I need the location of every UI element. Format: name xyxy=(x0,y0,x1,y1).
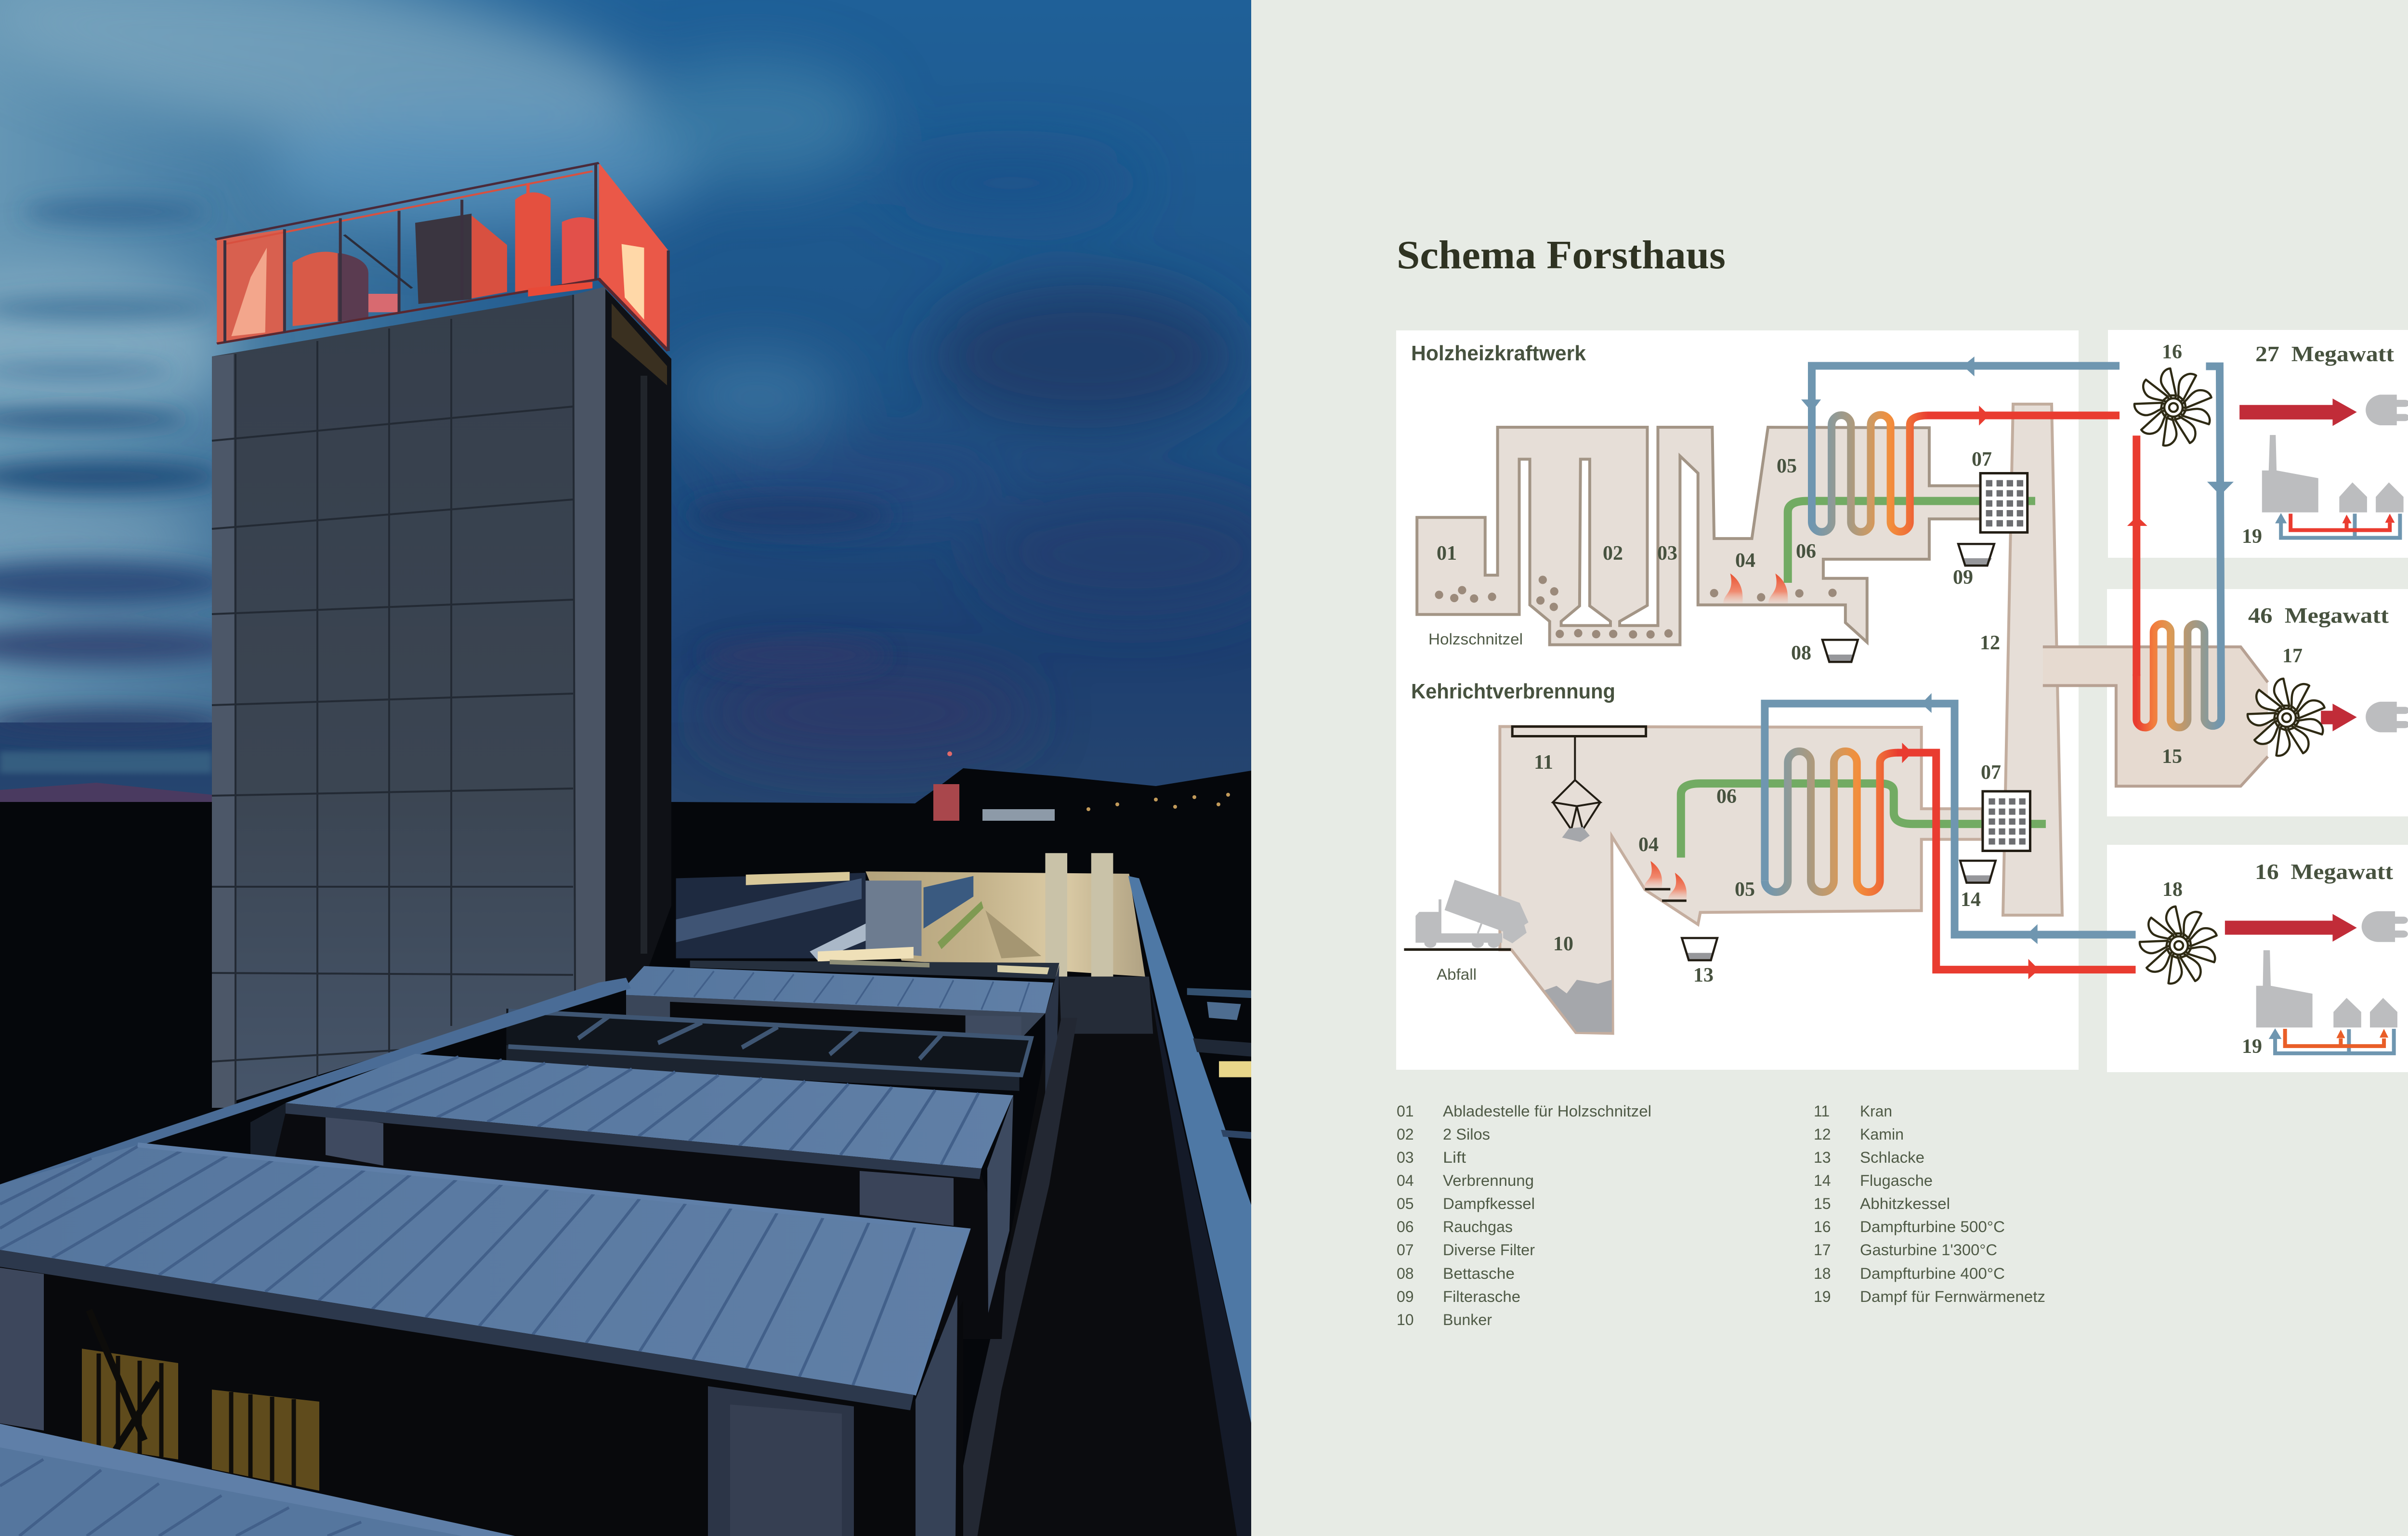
legend: Rauchgas xyxy=(1443,1218,1513,1235)
right walkway and parapet xyxy=(949,876,1252,1536)
diagram number labels: 04 xyxy=(1735,550,1755,572)
legend: 19 xyxy=(1814,1288,1831,1305)
dark landscape and hills xyxy=(0,751,1251,821)
electricity arrow 46 xyxy=(2321,704,2357,731)
legend: 18 xyxy=(1814,1265,1831,1282)
right glass side xyxy=(599,163,668,351)
diagram number labels xyxy=(1437,341,2303,1058)
blue return pipe xyxy=(1812,366,2120,522)
middle roof with wall xyxy=(250,1054,1013,1339)
skylight rail xyxy=(690,960,1059,979)
diagram number labels: 11 xyxy=(1534,751,1553,774)
flow arrows xyxy=(1801,356,1989,425)
legend: 08 xyxy=(1397,1265,1414,1282)
red-lit glass crown on the tower xyxy=(215,163,668,351)
label: Holzschnitzel: Holzschnitzel xyxy=(1428,630,1523,648)
diagram number labels: 05 xyxy=(1735,879,1755,901)
red pipe xyxy=(1898,753,2135,970)
legend: Abladestelle für Holzschnitzel xyxy=(1443,1103,1651,1120)
legend: 15 xyxy=(1814,1195,1831,1212)
wall xyxy=(626,995,1045,1038)
parapet strip leading to the tower xyxy=(0,978,631,1190)
wood chips xyxy=(1435,576,1837,639)
ground line xyxy=(1404,948,1511,951)
electricity arrow 27 xyxy=(2239,398,2357,426)
legend: 07 xyxy=(1397,1241,1414,1259)
legend: 17 xyxy=(1814,1241,1831,1259)
legend: Kamin xyxy=(1860,1126,1904,1143)
flue gas pipe xyxy=(1788,501,2035,583)
front roof with wall xyxy=(0,1145,968,1536)
wood-fired plant building xyxy=(1417,356,2120,662)
walkway xyxy=(954,977,1237,1536)
diagram number labels: 14 xyxy=(1961,889,1981,911)
roof plane xyxy=(0,1145,968,1395)
diagram number labels: 02 xyxy=(1603,542,1623,565)
ash bucket 08 xyxy=(1822,640,1858,662)
legend: Dampfturbine 400°C xyxy=(1860,1265,2005,1282)
blue pipe xyxy=(1765,704,2135,934)
panel: 46 Megawatt xyxy=(2107,589,2408,816)
diagram number labels: 10 xyxy=(1553,933,1573,955)
heading: 46 Megawatt: 46 Megawatt xyxy=(2248,604,2389,628)
panel: 16 Megawatt xyxy=(2107,845,2408,1072)
legend: Gasturbine 1'300°C xyxy=(1860,1241,1997,1259)
factory and houses xyxy=(2256,950,2397,1027)
steam coil xyxy=(1812,415,1928,532)
lattice frame xyxy=(506,1009,1031,1091)
conduit xyxy=(949,1018,1077,1536)
legend: Dampfturbine 500°C xyxy=(1860,1218,2005,1235)
fascia xyxy=(0,1250,914,1410)
riser arrow xyxy=(2127,516,2147,526)
diagram number labels: 16 xyxy=(2162,341,2182,363)
legend: 16 xyxy=(1814,1218,1831,1235)
diagram number labels: 12 xyxy=(1980,632,2000,654)
roof plane xyxy=(626,966,1053,1013)
legend: Verbrennung xyxy=(1443,1172,1534,1189)
plug 46 xyxy=(2366,702,2408,732)
waste incineration plant xyxy=(1404,693,2135,1033)
diagram number labels: 05 xyxy=(1777,455,1797,477)
legend: 12 xyxy=(1814,1126,1831,1143)
heat recovery duct 15 xyxy=(2043,647,2268,786)
crown frame xyxy=(215,163,668,351)
parapet side xyxy=(1149,979,1252,1536)
ash bucket 09 xyxy=(1958,544,1994,565)
plug 16 xyxy=(2362,911,2408,942)
legend: 04 xyxy=(1397,1172,1414,1189)
diagram number labels: 06 xyxy=(1716,786,1737,808)
crane load xyxy=(1562,827,1590,842)
turbine 16 xyxy=(2133,368,2213,448)
legend: Bunker xyxy=(1443,1311,1492,1328)
heading: 16 Megawatt: 16 Megawatt xyxy=(2255,860,2393,884)
label: Abfall: Abfall xyxy=(1437,966,1477,983)
legend: Kran xyxy=(1860,1103,1892,1120)
legend: 02 xyxy=(1397,1126,1414,1143)
diagram number labels: 18 xyxy=(2162,879,2183,901)
legend: 14 xyxy=(1814,1172,1831,1189)
roof edge trim xyxy=(138,1145,968,1395)
parapet top xyxy=(1128,876,1252,1427)
legend: 01 xyxy=(1397,1103,1414,1120)
diagram number labels: 01 xyxy=(1437,542,1457,565)
diagram number labels: 06 xyxy=(1796,540,1816,563)
structures beyond parapet xyxy=(1187,988,1252,998)
diagram number labels: 04 xyxy=(1638,834,1659,856)
flow arrows xyxy=(1902,693,2039,979)
district heating lines xyxy=(2269,1028,2394,1053)
legend: Bettasche xyxy=(1443,1265,1515,1282)
legend: Dampfkessel xyxy=(1443,1195,1535,1212)
waste heat coil 15 xyxy=(2136,624,2221,728)
legend: Flugasche xyxy=(1860,1172,1933,1189)
chimney 12 xyxy=(2003,404,2062,915)
diagram number labels: 19 xyxy=(2242,1036,2262,1058)
legend: Schlacke xyxy=(1860,1149,1924,1166)
diagram number labels: 13 xyxy=(1693,964,1714,986)
concrete tower xyxy=(212,287,671,1108)
diagram number labels: 08 xyxy=(1791,642,1811,664)
diagram number labels: 15 xyxy=(2162,746,2182,768)
ash bucket 14 xyxy=(1960,861,1996,883)
red riser xyxy=(2133,435,2140,676)
plug 27 xyxy=(2366,394,2408,425)
steam coil xyxy=(1765,751,1898,892)
panel: main diagram xyxy=(1396,330,2079,1070)
machine box xyxy=(415,214,471,304)
legend: Dampf für Fernwärmenetz xyxy=(1860,1288,2045,1305)
glowing lower edge xyxy=(528,282,592,297)
left glass panel xyxy=(217,229,285,343)
district heating lines xyxy=(2275,513,2400,538)
legend: Abhitzkessel xyxy=(1860,1195,1950,1212)
panel: 27 Megawatt xyxy=(2108,330,2408,558)
legend: Diverse Filter xyxy=(1443,1241,1535,1259)
flames xyxy=(1723,574,1788,604)
outputs for 16 Megawatt panel xyxy=(2225,911,2408,1053)
turbine 17 xyxy=(2246,679,2327,759)
heading: Holzheizkraftwerk: Holzheizkraftwerk xyxy=(1411,341,1586,365)
downcomer arrow xyxy=(2207,482,2234,495)
lit plant in the distance xyxy=(676,853,1145,977)
filter 07 xyxy=(1983,791,2030,851)
back roof xyxy=(626,959,1059,1093)
legend: 03 xyxy=(1397,1149,1414,1166)
end wall xyxy=(1045,965,1059,1093)
right tank xyxy=(562,217,596,285)
legend: 2 Silos xyxy=(1443,1126,1490,1143)
turbine 18 xyxy=(2138,906,2219,986)
blue downcomer xyxy=(2206,366,2221,707)
sky xyxy=(0,0,1286,819)
photo: tower at dusk xyxy=(0,0,1286,1536)
legend: 06 xyxy=(1397,1218,1414,1235)
foreground roof xyxy=(0,1424,515,1536)
title: Schema Forsthaus xyxy=(1397,233,1726,277)
diagram number labels: 19 xyxy=(2242,525,2262,548)
waste pile xyxy=(1544,980,1612,1032)
factory and houses xyxy=(2262,435,2404,512)
amber-lit interior xyxy=(82,1349,319,1491)
legend xyxy=(1397,1103,2045,1328)
flames xyxy=(1644,861,1687,900)
legend: 10 xyxy=(1397,1311,1414,1328)
grate bars xyxy=(1645,889,1687,901)
end wall xyxy=(916,1295,957,1536)
white door panel xyxy=(708,1386,854,1536)
legend: 09 xyxy=(1397,1288,1414,1305)
legend: 11 xyxy=(1814,1103,1830,1120)
walkway platform xyxy=(1059,977,1153,1034)
flue gas pipe xyxy=(1681,784,2046,858)
diagram number labels: 07 xyxy=(1972,448,1992,471)
legend: Lift xyxy=(1443,1149,1466,1166)
diagram number labels: 09 xyxy=(1953,566,1973,589)
left tank xyxy=(293,252,338,326)
crane xyxy=(1512,726,1646,830)
diagram number labels: 17 xyxy=(2282,645,2303,667)
legend: 13 xyxy=(1814,1149,1831,1166)
electricity arrow 16 xyxy=(2225,914,2357,942)
heading: 27 Megawatt: 27 Megawatt xyxy=(2255,342,2394,366)
diagram number labels: 03 xyxy=(1657,542,1677,565)
heading: Kehrichtverbrennung: Kehrichtverbrennung xyxy=(1411,680,1615,703)
outline of silo, lift, boiler xyxy=(1417,427,1981,645)
legend: 05 xyxy=(1397,1195,1414,1212)
truck xyxy=(1415,880,1529,948)
tall tank xyxy=(515,192,550,292)
legend: Filterasche xyxy=(1443,1288,1520,1305)
building outline xyxy=(1500,726,1982,1033)
filter 07 xyxy=(1980,473,2028,532)
gas turbine circuit and outputs xyxy=(2127,366,2408,732)
diagram number labels: 07 xyxy=(1981,761,2001,784)
red steam pipe xyxy=(1928,412,2120,420)
ash bucket 13 xyxy=(1682,938,1717,960)
small red frame xyxy=(368,294,399,312)
